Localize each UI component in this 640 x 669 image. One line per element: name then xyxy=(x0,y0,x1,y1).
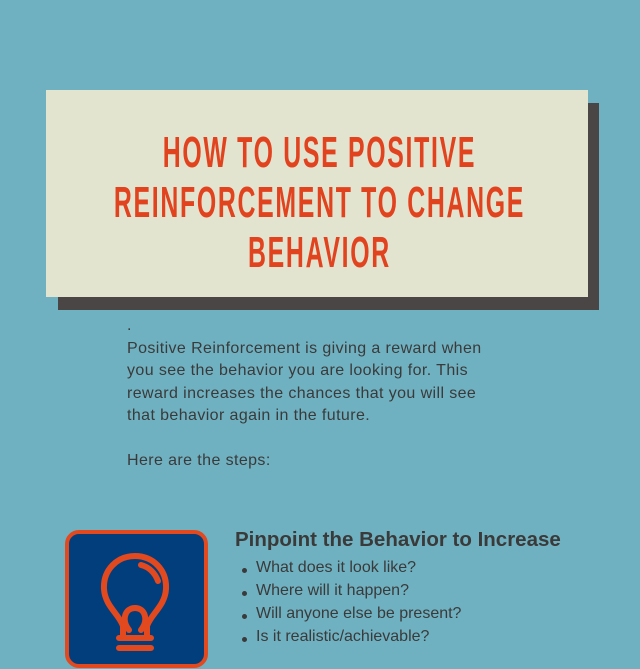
intro text xyxy=(127,317,482,469)
step heading: Pinpoint the Behavior to Increase xyxy=(235,528,561,551)
title shadow xyxy=(58,103,599,310)
step 1 xyxy=(235,528,561,645)
intro text: Here are the steps: xyxy=(127,452,271,469)
step bullets: Where will it happen? xyxy=(256,582,409,599)
title: REINFORCEMENT TO CHANGE xyxy=(114,178,525,227)
title: BEHAVIOR xyxy=(248,228,391,277)
intro text: . xyxy=(127,317,132,334)
step bullets: Is it realistic/achievable? xyxy=(256,628,429,645)
step bullets: What does it look like? xyxy=(256,559,416,576)
step bullets xyxy=(242,559,461,645)
title: HOW TO USE POSITIVE xyxy=(163,128,476,177)
title xyxy=(114,128,525,277)
icon: light bulb xyxy=(65,530,208,668)
title box xyxy=(46,90,588,297)
intro text: Positive Reinforcement is giving a reward when you see the behavior you are looking for. This reward increases the chances that you will see that behavior again in the future. xyxy=(127,340,482,424)
step bullets: Will anyone else be present? xyxy=(256,605,461,622)
